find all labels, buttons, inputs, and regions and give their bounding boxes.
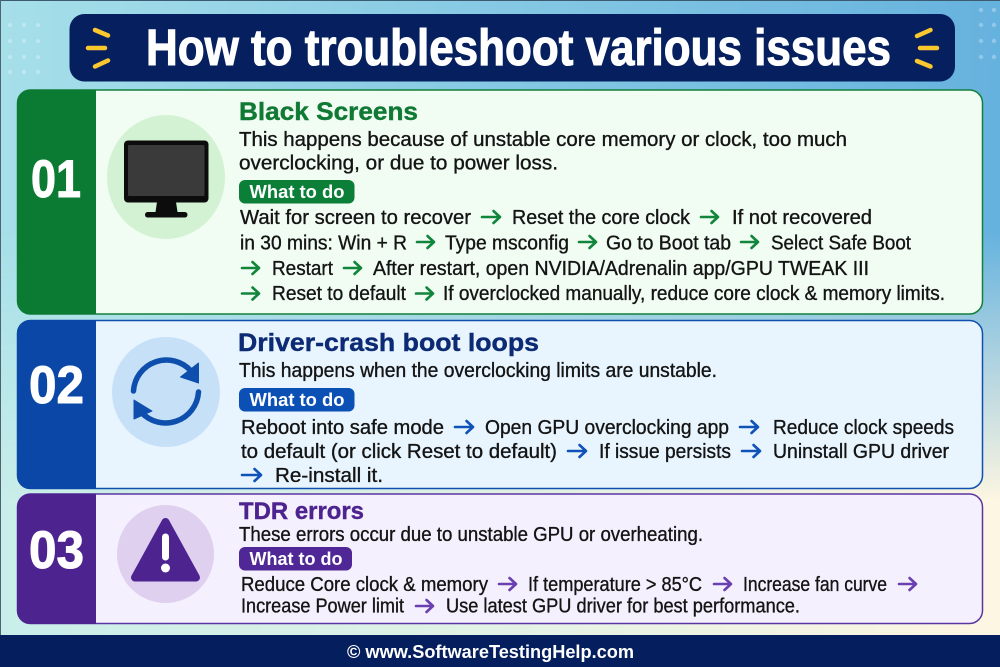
arrow <box>714 578 731 590</box>
title banner <box>70 14 955 82</box>
arrow <box>242 288 259 300</box>
steps: TDR errors: Increase Power limit <box>241 596 404 618</box>
arrow <box>416 600 433 612</box>
steps: boot loops: to default (or click Reset to default) <box>241 441 557 463</box>
panel: 03 TDR errors <box>17 494 982 624</box>
arrow <box>740 421 758 433</box>
steps: Black Screens: If not recovered <box>732 207 872 229</box>
steps: Black Screens: in 30 mins: Win + R <box>240 232 407 254</box>
steps: Black Screens: Reset to default <box>272 283 406 305</box>
arrow <box>455 421 473 433</box>
heading: TDR errors: TDR errors <box>239 498 364 525</box>
arrow <box>701 211 718 223</box>
panel: 02 Driver-crash boot loops <box>17 320 982 489</box>
steps: boot loops: Reduce clock speeds <box>773 417 954 439</box>
arrow <box>416 288 433 300</box>
steps: TDR errors <box>241 574 916 618</box>
arrow <box>482 211 500 223</box>
steps: TDR errors: Use latest GPU driver for best performance. <box>446 596 800 618</box>
arrow <box>568 445 586 457</box>
text block: cause: This happens when the overclocking limits are unstable. <box>239 360 717 382</box>
steps: boot loops: Open GPU overclocking app <box>485 417 729 439</box>
heading: Black Screens: Black Screens <box>239 98 418 126</box>
badge: What to do: What to do <box>250 549 342 569</box>
badge: What to do: What to do <box>250 182 344 202</box>
steps: Black Screens: Type msconfig <box>445 232 569 254</box>
steps: Black Screens: If overclocked manually, reduce core clock & memory limits. <box>443 283 945 305</box>
steps: TDR errors: If temperature > 85°C <box>528 574 702 596</box>
title: How to troubleshoot various issues <box>146 19 891 76</box>
steps: boot loops: Re-install it. <box>275 465 383 487</box>
arrow <box>899 578 916 590</box>
arrow <box>742 445 760 457</box>
footer bar <box>0 635 1000 667</box>
text block: cause: overclocking, or due to power loss. <box>239 152 558 174</box>
steps: boot loops: If issue persists <box>599 441 731 463</box>
arrow <box>741 236 758 248</box>
icon: left yellow burst <box>88 30 108 66</box>
steps: boot loops <box>241 417 954 487</box>
icon: sync arrows <box>112 337 220 447</box>
text block: cause <box>239 129 847 174</box>
steps: Black Screens: After restart, open NVIDIA/Adrenalin app/GPU TWEAK III <box>373 258 869 280</box>
panel: 01 Black Screens <box>17 90 982 314</box>
number 03: 03 <box>29 521 84 580</box>
text block: cause: This happens because of unstable core memory or clock, too much <box>239 129 847 151</box>
arrow <box>242 469 261 481</box>
number 01: 01 <box>31 150 81 209</box>
arrow <box>417 236 434 248</box>
icon: right yellow burst <box>917 30 937 66</box>
arrow <box>579 236 596 248</box>
text block: cause: These errors occur due to unstable GPU or overheating. <box>239 524 703 546</box>
steps: TDR errors: Increase fan curve <box>743 574 887 596</box>
steps: Black Screens: Reset the core clock <box>512 207 691 229</box>
number 02: 02 <box>29 356 84 415</box>
icon: monitor <box>107 115 225 239</box>
steps: Black Screens: Select Safe Boot <box>771 232 911 254</box>
icon: warning triangle <box>117 505 214 603</box>
steps: Black Screens: Wait for screen to recover <box>240 207 471 229</box>
footer text: © www.SoftwareTestingHelp.com <box>347 641 634 662</box>
steps: boot loops: Uninstall GPU driver <box>773 441 949 463</box>
steps: TDR errors: Reduce Core clock & memory <box>241 574 488 596</box>
steps: boot loops: Reboot into safe mode <box>241 417 444 439</box>
arrow <box>499 578 516 590</box>
badge: What to do <box>239 388 354 412</box>
arrow <box>242 262 259 274</box>
steps: Black Screens: Go to Boot tab <box>606 232 731 254</box>
steps: Black Screens: Restart <box>272 258 333 280</box>
steps: Black Screens <box>240 207 945 305</box>
badge: What to do: What to do <box>250 390 344 410</box>
badge: What to do <box>239 180 354 204</box>
heading: Driver-crash boot loops: Driver-crash boot loops <box>238 329 539 357</box>
arrow <box>344 262 361 274</box>
